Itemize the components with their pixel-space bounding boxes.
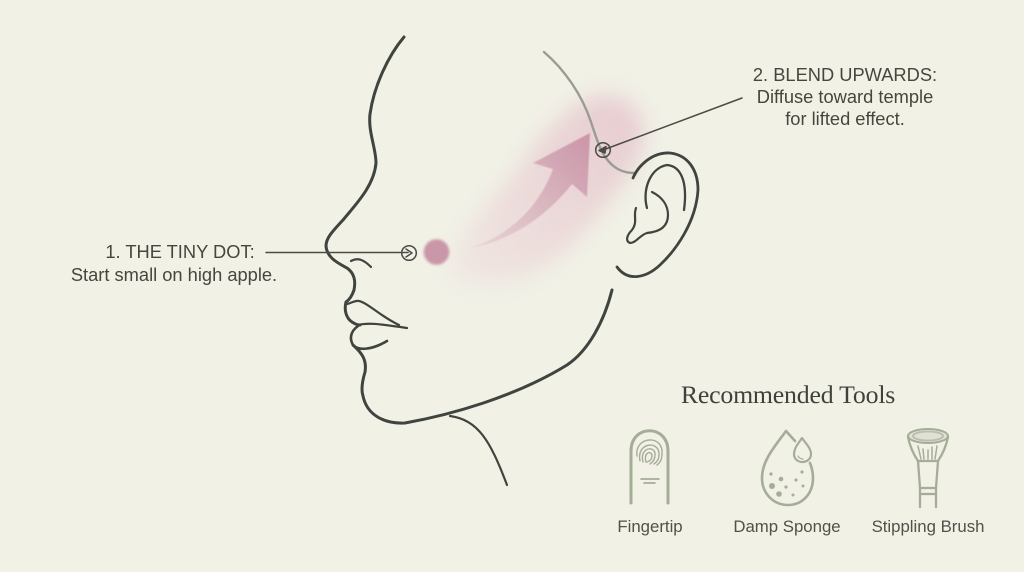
callout text: the tiny dot	[71, 241, 277, 285]
face profile	[326, 37, 612, 485]
callout text: blend upwards: for lifted effect.	[785, 108, 905, 129]
callout line 2	[596, 98, 742, 157]
hairline	[544, 52, 635, 173]
callout text: the tiny dot: Start small on high apple.	[71, 264, 277, 285]
blush arrow	[470, 133, 590, 248]
icon: stippling brush	[908, 429, 948, 507]
ear	[617, 153, 698, 277]
callout text: blend upwards: 2. BLEND UPWARDS:	[753, 64, 937, 85]
blush dot	[424, 239, 449, 265]
callout text: blend upwards	[753, 64, 937, 129]
heading: recommended tools: Recommended Tools	[681, 380, 895, 409]
icon: damp sponge	[762, 431, 813, 505]
callout line 1	[266, 246, 416, 260]
label: stippling brush: Stippling Brush	[872, 517, 984, 536]
icon: fingertip	[631, 431, 668, 503]
label: damp sponge: Damp Sponge	[733, 517, 841, 536]
blush wash	[450, 95, 644, 284]
callout text: blend upwards: Diffuse toward temple	[757, 86, 933, 107]
label: fingertip: Fingertip	[617, 517, 683, 536]
callout text: the tiny dot: 1. THE TINY DOT:	[105, 241, 255, 262]
